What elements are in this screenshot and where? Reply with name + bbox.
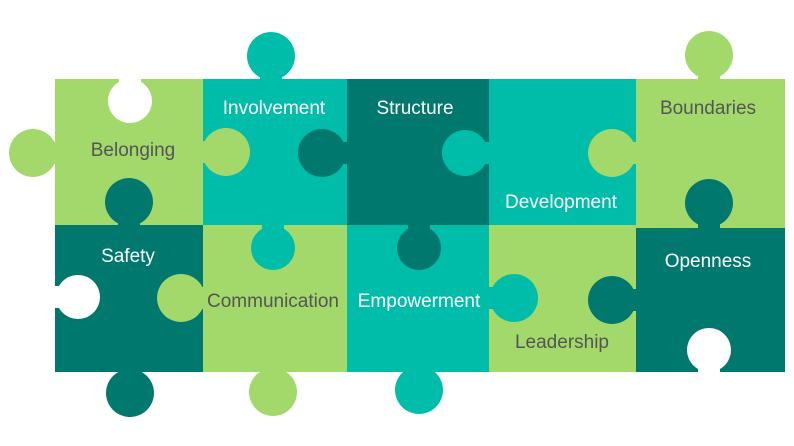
outer holes: [50, 75, 731, 376]
piece: Safety: [55, 225, 203, 372]
labels: Development: [505, 192, 618, 213]
piece: Openness: [636, 228, 785, 372]
labels: Safety: [101, 246, 155, 267]
labels: Openness: [665, 251, 751, 272]
dark teal knobs: [105, 129, 733, 417]
labels: Empowerment: [358, 291, 481, 312]
piece: Structure: [347, 79, 489, 225]
piece: Empowerment: [347, 225, 489, 372]
labels: Structure: [376, 98, 454, 119]
light green knobs: [9, 31, 733, 416]
labels: Involvement: [223, 98, 326, 119]
piece: Leadership: [489, 225, 636, 372]
labels: Leadership: [515, 332, 609, 353]
labels: Belonging: [91, 140, 175, 161]
piece: Belonging: [55, 79, 203, 225]
piece: Boundaries: [636, 79, 785, 228]
piece: Communication: [203, 225, 347, 372]
labels: Boundaries: [660, 98, 756, 119]
piece: Involvement: [203, 79, 347, 225]
piece bodies: [55, 79, 785, 372]
labels: Communication: [207, 291, 339, 312]
piece: Development: [489, 79, 636, 225]
labels: [91, 98, 756, 353]
teal knobs: [247, 32, 538, 414]
